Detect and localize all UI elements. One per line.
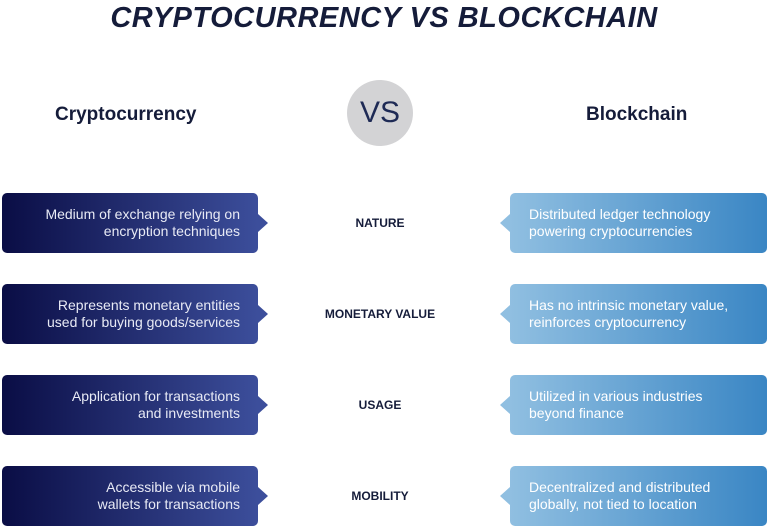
row: monetary right: Has no intrinsic monetary value,	[529, 297, 728, 313]
label: monetary value: MONETARY VALUE	[325, 307, 435, 321]
label: nature: NATURE	[355, 216, 405, 230]
row: monetary left: used for buying goods/services	[47, 314, 240, 330]
row: nature left: Medium of exchange relying on	[45, 206, 240, 222]
row: mobility right: Decentralized and distributed	[529, 479, 710, 495]
row: usage left	[2, 375, 258, 435]
row: mobility left: wallets for transactions	[98, 496, 240, 512]
row: nature right: Distributed ledger technology	[529, 206, 710, 222]
label: usage: USAGE	[359, 398, 401, 412]
row: usage left: Application for transactions	[72, 388, 240, 404]
row: nature right	[510, 193, 767, 253]
heading: Blockchain: Blockchain	[586, 104, 687, 125]
row: mobility right: globally, not tied to location	[529, 496, 697, 512]
row: monetary left: Represents monetary entities	[58, 297, 240, 313]
row: nature left	[2, 193, 258, 253]
icon: VS circle	[347, 80, 413, 146]
row: mobility left: Accessible via mobile	[106, 479, 240, 495]
row: mobility right	[510, 466, 767, 526]
row: monetary right	[510, 284, 767, 344]
row: monetary left	[2, 284, 258, 344]
row: usage right: beyond finance	[529, 405, 624, 421]
heading: Cryptocurrency: Cryptocurrency	[55, 104, 196, 125]
row: monetary right: reinforces cryptocurrency	[529, 314, 686, 330]
row: mobility left	[2, 466, 258, 526]
row: nature right: powering cryptocurrencies	[529, 223, 692, 239]
row: nature left: encryption techniques	[104, 223, 240, 239]
row: usage left: and investments	[138, 405, 240, 421]
row: usage right: Utilized in various industries	[529, 388, 703, 404]
title: CRYPTOCURRENCY VS BLOCKCHAIN	[110, 2, 658, 34]
row: usage right	[510, 375, 767, 435]
label: mobility: MOBILITY	[351, 489, 409, 503]
icon: VS circle: VS	[360, 96, 400, 129]
